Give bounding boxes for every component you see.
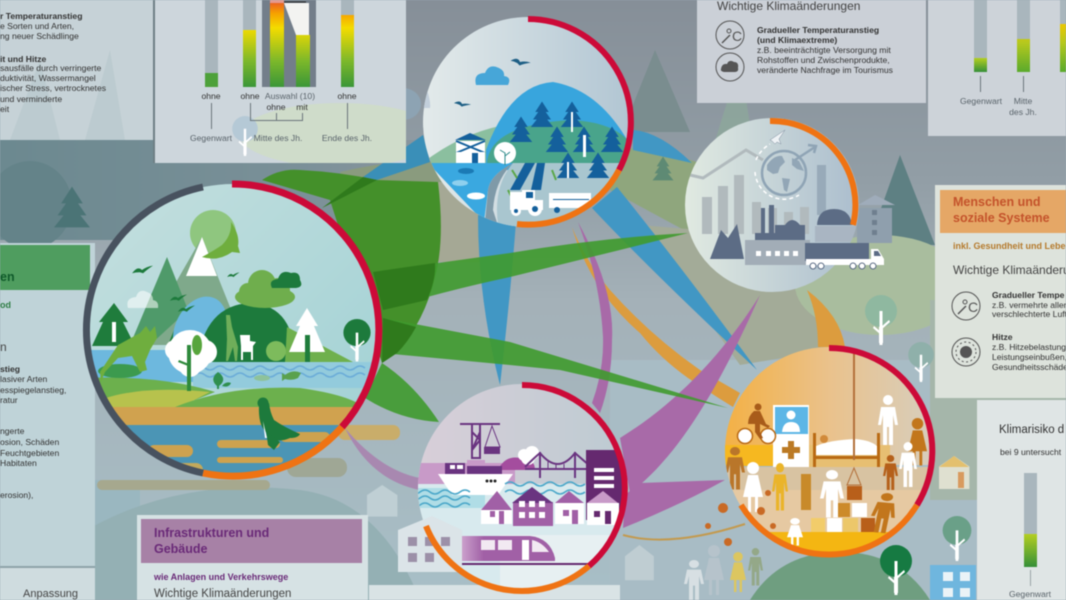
panel: climate risk bottom right: Gegenwart <box>1009 589 1052 599</box>
panel: agriculture text (top left): duktivität, Wassermangel <box>0 73 96 83</box>
trend line <box>690 150 763 178</box>
panel: industry text (top right): veränderte Nachfrage im Tourismus <box>757 65 893 75</box>
globe <box>755 144 816 199</box>
panel: agriculture text (top left) <box>0 0 155 163</box>
panel: climate risk chart (top centre): ohne <box>240 91 260 101</box>
panel: climate risk chart (top far right): Gegenwart <box>960 96 1003 106</box>
ground bands <box>85 378 215 400</box>
bar: present day <box>205 0 218 87</box>
panel: climate risk chart (top centre): Gegenwart <box>190 133 233 143</box>
bar: end of century <box>341 0 354 87</box>
fish <box>467 192 485 200</box>
panel: climate risk chart (top centre): ohne <box>337 91 357 101</box>
circle: infrastructure <box>398 380 630 595</box>
white tree <box>494 142 516 165</box>
panel: humans and social systems: Gesundheitsschäde <box>992 362 1066 372</box>
panel: natural systems (left): lasiver Arten <box>0 374 48 384</box>
cyclist <box>738 404 776 444</box>
panel heading <box>940 190 1066 233</box>
fish <box>282 371 301 381</box>
panel heading <box>141 519 362 563</box>
white tree <box>289 308 325 362</box>
leaf plant <box>213 372 231 389</box>
panel: humans and social systems: Gradueller Tempe <box>992 290 1065 300</box>
water waves <box>400 482 585 507</box>
panel: infrastructure and buildings: wie Anlagen und Verkehrswege <box>153 572 288 582</box>
panel: natural systems (left): esspiegelanstieg, <box>0 385 66 395</box>
panel: infrastructure and buildings: Wichtige Klimaänderungen <box>154 588 291 600</box>
panel: industry text (top right): Rohstoffen und Zwischenprodukte, <box>757 55 890 65</box>
risk arcs <box>426 385 625 591</box>
viruses <box>705 490 776 546</box>
wolf <box>98 326 157 382</box>
panel: climate risk chart (top centre): Ende des Jh. <box>322 133 372 143</box>
crane <box>460 424 500 458</box>
circle: natural systems <box>80 175 390 485</box>
panel heading: Gebäude <box>154 542 208 556</box>
tower <box>586 450 622 520</box>
panel: natural systems (left): stieg <box>0 364 20 374</box>
panel: climate risk chart (top centre): mit <box>296 102 308 112</box>
panel: natural systems (left): ratur <box>0 395 18 405</box>
panel: agriculture text (top left): sausfälle durch verringerte <box>0 63 101 73</box>
flow arrows between sectors <box>262 130 845 540</box>
panel: natural systems (left) <box>0 243 95 600</box>
deer <box>226 315 256 361</box>
panel: agriculture text (top left): e Sorten und Arten, <box>0 21 74 31</box>
panel: natural systems (left): od <box>0 300 11 310</box>
panel: natural systems (left): ngerte <box>0 426 25 436</box>
people <box>878 395 898 445</box>
panel heading: Menschen und <box>953 195 1041 209</box>
background decor: trees and houses <box>54 157 976 600</box>
bar chart silhouette <box>702 175 809 234</box>
panel heading: en <box>0 270 15 284</box>
panel: humans and social systems <box>935 185 1066 398</box>
risk arcs <box>517 19 631 225</box>
field <box>496 162 620 226</box>
trees <box>510 102 623 178</box>
panel: industry text (top right) <box>697 0 926 103</box>
panel: humans and social systems: Leistungseinbußen, <box>992 352 1066 362</box>
circle: humans and social systems <box>705 345 940 562</box>
icon: thermometer: C <box>968 299 978 315</box>
panel: natural systems (left): n <box>0 340 7 354</box>
risk arc <box>770 121 855 225</box>
train <box>460 536 590 565</box>
circle: agriculture, forestry, fisheries <box>412 15 640 235</box>
panel: climate risk bottom right <box>977 400 1066 600</box>
flow: infrastructure (purple) <box>345 222 760 528</box>
hill and cloud <box>498 458 535 470</box>
panel: agriculture text (top left): eit <box>0 104 10 114</box>
water <box>431 162 502 218</box>
birds <box>454 58 531 108</box>
plane <box>770 130 785 144</box>
bar: mid century without adaptation <box>243 0 256 87</box>
tree <box>343 319 371 362</box>
highlighted box: selection of ten <box>262 0 316 87</box>
panel: humans and social systems: verschlechterte Luft <box>992 309 1066 319</box>
clouds <box>235 270 295 308</box>
water <box>91 350 194 382</box>
panel: agriculture text (top left): r Temperaturanstieg <box>0 11 82 21</box>
bridge <box>525 452 590 478</box>
panel: climate risk chart (top centre): Auswahl (10) <box>265 91 315 101</box>
panel heading <box>0 245 90 290</box>
risk arcs <box>741 348 932 554</box>
medical sign <box>773 405 809 467</box>
tractor and trailer <box>510 190 591 216</box>
blue dome <box>486 82 630 170</box>
panel heading: Infrastrukturen und <box>154 526 269 540</box>
pine <box>92 303 135 346</box>
icon: extreme weather <box>716 53 744 81</box>
panel: humans and social systems: inkl. Gesundheit und Lebe <box>953 241 1066 251</box>
factory <box>710 205 805 259</box>
cloud <box>475 66 509 85</box>
panel: climate risk chart (top far right): des Jh. <box>1009 107 1037 117</box>
panel: industry text (top right): (und Klimaextreme) <box>757 35 837 45</box>
panel: natural systems (left): Feuchtgebieten <box>0 448 59 458</box>
panel: natural systems (left): Habitaten <box>0 458 37 468</box>
panel: infrastructure and buildings <box>137 515 368 600</box>
icon: thermometer: C <box>732 28 742 44</box>
flow: economy and humans (orange) <box>572 227 845 407</box>
flow: agriculture (blue) <box>363 130 757 385</box>
panel: agriculture text (top left): ng neuer Schädlinge <box>0 31 79 41</box>
panel: agriculture text (top left): it und Hitze <box>0 54 47 64</box>
panel: climate risk chart (top far right): Mitte <box>1014 96 1033 106</box>
panel: agriculture text (top left): ischer Stress, vertrocknetes <box>0 83 106 93</box>
flow: nature to other systems (green) <box>262 170 728 422</box>
panel: humans and social systems: z.B. vermehrte aller <box>992 300 1066 310</box>
panel: bottom centre (partly visible) <box>369 585 620 600</box>
panel: natural systems (left): erosion), <box>0 490 33 500</box>
dome <box>817 209 852 225</box>
panel: natural systems (left): Anpassung <box>23 588 78 600</box>
panel: climate risk chart (top centre): Mitte des Jh. <box>254 133 302 143</box>
panel: climate risk chart (top centre): ohne <box>266 102 286 112</box>
icon: sun heat <box>952 338 980 366</box>
farmhouse <box>455 133 486 163</box>
panel: climate risk chart (top centre) <box>154 0 407 164</box>
birds <box>132 266 240 312</box>
risk arcs <box>86 184 379 476</box>
bed <box>813 433 880 467</box>
panel: climate risk bottom right: Klimarisiko d <box>999 424 1064 436</box>
icon: thermometer <box>952 292 980 320</box>
truck <box>805 243 884 269</box>
circle: industry and trade <box>680 115 895 295</box>
hill <box>204 303 290 363</box>
panel: industry text (top right): z.B. beeinträchtigte Versorgung mit <box>757 45 891 55</box>
panel: climate risk bottom right: bei 9 untersucht <box>1000 447 1062 457</box>
seal <box>258 398 300 450</box>
panel: agriculture text (top left): und verminderte <box>0 94 62 104</box>
icon: thermometer <box>716 21 744 49</box>
mountains <box>133 237 230 346</box>
houses <box>481 487 619 526</box>
owl tree <box>165 330 217 391</box>
panel heading: soziale Systeme <box>953 211 1050 225</box>
eagle <box>202 222 240 259</box>
sun <box>190 210 236 256</box>
panel: humans and social systems: Hitze <box>992 332 1013 342</box>
panel: natural systems (left): osion, Schäden <box>0 437 59 447</box>
panel: climate risk chart (top centre): ohne <box>201 91 221 101</box>
ship <box>438 460 513 495</box>
panel: climate risk chart (top far right) <box>928 0 1066 136</box>
panel: industry text (top right): Gradueller Temperaturanstieg <box>757 25 879 35</box>
boxes <box>811 503 875 532</box>
hanging rope and crate <box>847 345 862 500</box>
silo <box>857 195 895 243</box>
foreground house <box>398 516 462 572</box>
light hill <box>429 126 496 164</box>
